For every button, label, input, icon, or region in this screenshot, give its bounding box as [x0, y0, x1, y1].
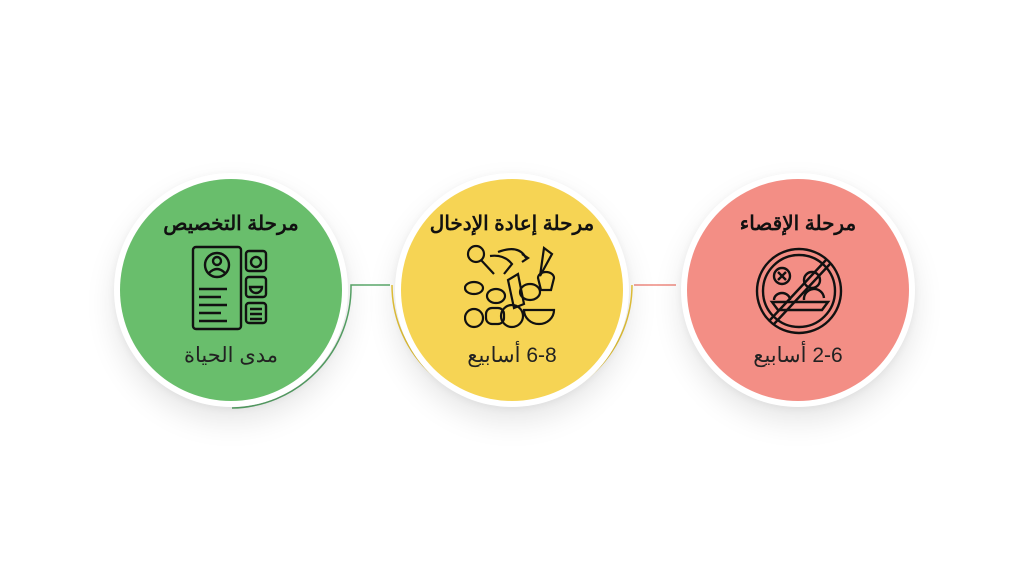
- panel: specialization stage (green): [108, 179, 354, 426]
- text: 2-6 weeks: 2-6 أسابيع: [753, 344, 843, 367]
- icon: profile diet list: [192, 246, 268, 330]
- icon: no food: [756, 248, 842, 334]
- heading: yellow: مرحلة إعادة الإدخال: [430, 213, 594, 235]
- panel: reintroduction stage (yellow): [390, 179, 634, 426]
- text: 6-8 weeks: 6-8 أسابيع: [467, 344, 557, 367]
- text: lifetime: مدى الحياة: [184, 344, 278, 367]
- heading: green: مرحلة التخصيص: [163, 213, 299, 235]
- panel: elimination stage (red): [676, 179, 920, 426]
- heading: red: مرحلة الإقصاء: [740, 213, 856, 235]
- icon: foods with arrows: [464, 244, 556, 328]
